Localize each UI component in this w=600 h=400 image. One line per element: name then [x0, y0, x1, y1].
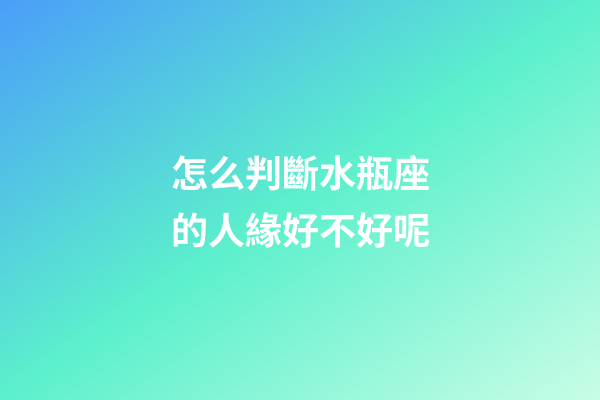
title line 1: 怎么判斷水瓶座 [171, 154, 430, 195]
title line 2: 的人緣好不好呢 [171, 211, 430, 252]
title [171, 154, 430, 252]
